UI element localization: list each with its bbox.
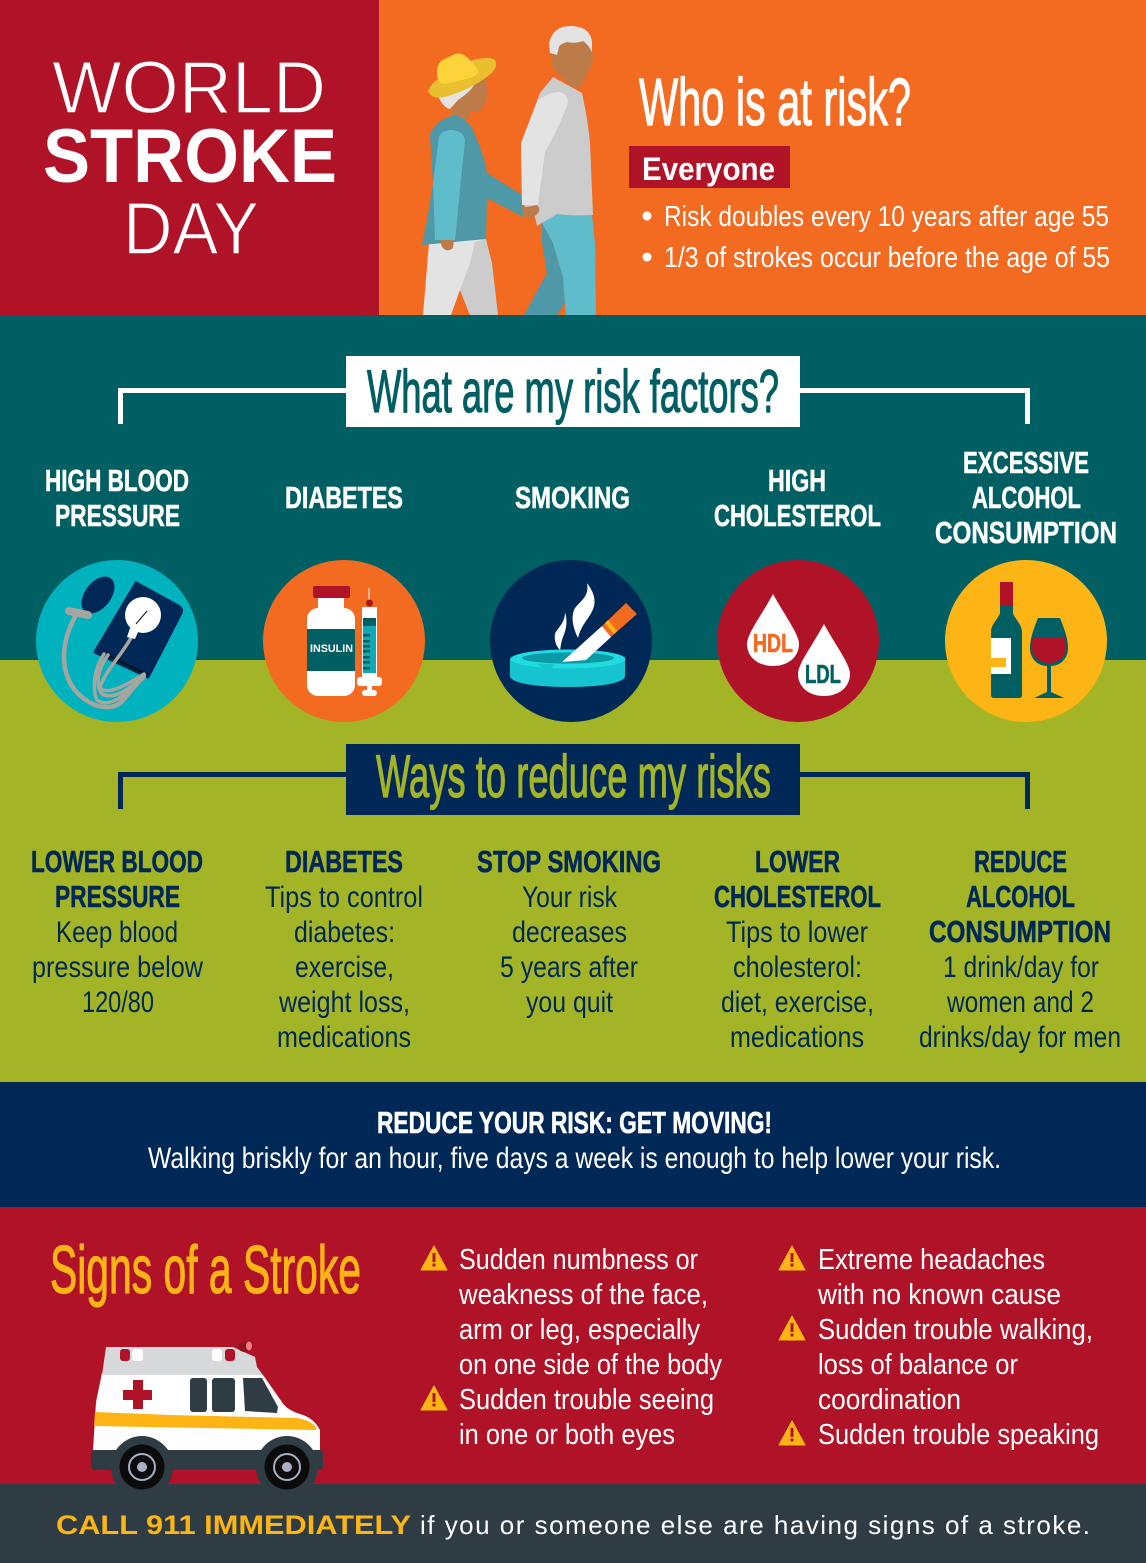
heading: what are my risk factors: What are my risk factors?: [367, 358, 779, 425]
icon: insulin vial and syringe: [263, 560, 425, 722]
title: WORLD: [52, 46, 326, 129]
panel: risk factors background: [0, 315, 1146, 660]
heading: signs of a stroke: Signs of a Stroke: [50, 1232, 361, 1308]
panel: ways to reduce background: [0, 660, 1146, 1082]
icon: HDL and LDL drops: LDL: [805, 659, 841, 689]
icon: warning sign: [779, 1246, 805, 1270]
risk factor labels: PRESSURE: [55, 498, 180, 533]
title: STROKE: [43, 114, 337, 199]
sign: numbness or weakness: [458, 1244, 722, 1381]
sign: extreme headaches: [817, 1244, 1061, 1311]
illustration: older couple walking: [422, 26, 596, 315]
title: DAY: [123, 187, 259, 270]
tip: stop smoking: you quit: [526, 986, 614, 1019]
risk bullet list: [642, 201, 1110, 274]
risk factor labels: HIGH BLOOD: [45, 463, 189, 498]
tip: lower cholesterol: cholesterol:: [733, 951, 862, 984]
tip: stop smoking: [477, 844, 661, 1019]
icon: insulin vial and syringe: INSULIN: [310, 643, 353, 655]
risk factor labels: SMOKING: [515, 480, 630, 515]
icon: warning sign: [421, 1246, 447, 1270]
sign: trouble speaking: Sudden trouble speaking: [818, 1419, 1099, 1451]
panel: world stroke day title: [0, 0, 379, 315]
icon: HDL and LDL drops: [717, 560, 879, 722]
risk factor labels: EXCESSIVE: [963, 445, 1089, 480]
tip: reduce alcohol consumption: 1 drink/day for: [943, 951, 1099, 984]
tip: lower cholesterol: Tips to lower: [726, 916, 868, 949]
tip: lower cholesterol: diet, exercise,: [721, 986, 874, 1019]
icon: ambulance: [91, 1342, 323, 1498]
tip: diabetes: [265, 844, 423, 1054]
tip: lower cholesterol: CHOLESTEROL: [714, 879, 881, 914]
tip: lower cholesterol: medications: [730, 1021, 864, 1054]
tip: lower cholesterol: LOWER: [755, 844, 840, 879]
risk factor labels: [45, 445, 1117, 550]
icon: ashtray and cigarette: [490, 560, 652, 722]
tip: stop smoking: 5 years after: [500, 951, 638, 984]
sign: trouble seeing: Sudden trouble seeing: [459, 1384, 714, 1416]
icon: blood pressure cuff: [36, 560, 198, 722]
icon: warning sign: [779, 1421, 805, 1445]
badge: everyone: Everyone: [642, 151, 775, 187]
tip: lower blood pressure: PRESSURE: [55, 879, 180, 914]
panel: call 911 footer: CALL 911 IMMEDIATELY: [56, 1510, 411, 1540]
tip: stop smoking: STOP SMOKING: [477, 844, 661, 879]
tip: lower blood pressure: 120/80: [82, 986, 154, 1019]
sign: trouble seeing: [459, 1384, 714, 1451]
sign: numbness or weakness: Sudden numbness or: [459, 1244, 698, 1276]
sign: trouble walking: coordination: [818, 1384, 961, 1416]
sign: trouble walking: Sudden trouble walking,: [818, 1314, 1093, 1346]
panel: call 911 footer: if you or someone else are having signs of a stroke.: [420, 1510, 1090, 1540]
risk factor labels: ALCOHOL: [972, 480, 1081, 515]
risk factor labels: HIGH: [768, 463, 826, 498]
tip: diabetes: exercise,: [295, 951, 394, 984]
panel: who is at risk: [379, 0, 1146, 315]
tip: reduce alcohol consumption: [919, 844, 1121, 1054]
icon: wine bottle and glass: [945, 560, 1107, 722]
risk factor labels: DIABETES: [285, 480, 403, 515]
icon: warning sign: [779, 1316, 805, 1340]
tip: diabetes: Tips to control: [265, 881, 423, 914]
tip: reduce alcohol consumption: women and 2: [946, 986, 1094, 1019]
panel: signs of a stroke: [0, 1207, 1146, 1498]
tip: lower blood pressure: [31, 844, 203, 1019]
risk factor labels: CHOLESTEROL: [714, 498, 881, 533]
tip: stop smoking: Your risk: [522, 881, 618, 914]
sign: extreme headaches: Extreme headaches: [818, 1244, 1045, 1276]
sign: numbness or weakness: on one side of the body: [459, 1349, 722, 1381]
icon: warning sign: [421, 1386, 447, 1410]
sign: extreme headaches: with no known cause: [817, 1279, 1061, 1311]
title: [43, 46, 337, 270]
sign: numbness or weakness: weakness of the face,: [458, 1279, 708, 1311]
sign: numbness or weakness: arm or leg, especially: [459, 1314, 700, 1346]
heading: who is at risk: Who is at risk?: [639, 65, 911, 140]
tip: lower blood pressure: LOWER BLOOD: [31, 844, 203, 879]
tip: diabetes: diabetes:: [294, 916, 395, 949]
icon: HDL and LDL drops: HDL: [753, 628, 793, 658]
tip: diabetes: medications: [277, 1021, 411, 1054]
panel: call 911 footer: [0, 1484, 1146, 1563]
tip: lower blood pressure: pressure below: [32, 951, 203, 984]
panel: get moving callout: [0, 1082, 1146, 1207]
sign: trouble seeing: in one or both eyes: [459, 1419, 675, 1451]
heading: ways to reduce my risks: [120, 743, 1028, 815]
panel: get moving callout: REDUCE YOUR RISK: GET MOVING!: [377, 1105, 772, 1140]
tip: lower cholesterol: [714, 844, 881, 1054]
tip: stop smoking: decreases: [512, 916, 627, 949]
heading: what are my risk factors: [120, 356, 1028, 427]
heading: ways to reduce my risks: Ways to reduce my risks: [376, 743, 771, 810]
tip: lower blood pressure: Keep blood: [56, 916, 178, 949]
sign: trouble walking: [818, 1314, 1093, 1416]
tip: reduce alcohol consumption: REDUCE: [974, 844, 1067, 879]
tip: diabetes: weight loss,: [278, 986, 410, 1019]
sign: trouble walking: loss of balance or: [818, 1349, 1018, 1381]
tip: diabetes: DIABETES: [285, 844, 403, 879]
tip: reduce alcohol consumption: ALCOHOL: [966, 879, 1075, 914]
